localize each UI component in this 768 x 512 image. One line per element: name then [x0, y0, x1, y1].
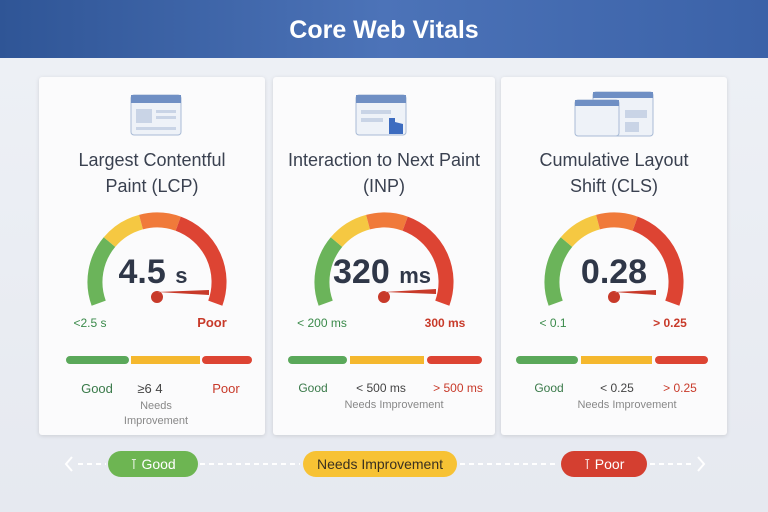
bar: CLS: [516, 356, 708, 364]
heading: (INP): [363, 176, 405, 196]
icon: shifted windows: [574, 92, 654, 136]
icon: browser: [130, 94, 182, 136]
heading: Largest Contentful: [78, 150, 226, 170]
heading: [78, 150, 226, 196]
gauge labels: <2.5 s: [73, 316, 107, 330]
gauge: CLS: [552, 220, 676, 303]
text: < 0.25: [600, 381, 634, 395]
heading: Paint (LCP): [105, 176, 199, 196]
panel: LCP: [39, 77, 265, 435]
heading: Shift (CLS): [570, 176, 658, 196]
text: Good: [298, 381, 328, 395]
text: Poor: [212, 381, 240, 396]
text: Good: [534, 381, 564, 395]
text: 0.28: [581, 253, 647, 291]
pill: needs improvement: Needs Improvement: [317, 456, 443, 472]
text: 320 ms: [333, 253, 431, 291]
text: ≥6 4: [137, 381, 163, 396]
bar labels: Good: [81, 381, 113, 396]
heading: Interaction to Next Paint: [288, 150, 480, 170]
text: Needs: [140, 400, 172, 412]
pill: good: [108, 451, 198, 477]
text: < 0.1: [539, 316, 567, 330]
text: Needs Improvement: [577, 399, 677, 411]
pill: good: ⊺ Good: [130, 456, 176, 472]
pill: poor: [561, 451, 647, 477]
legend line: [66, 457, 704, 471]
text: < 200 ms: [297, 316, 347, 330]
icon: browser click: [356, 94, 406, 136]
text: < 500 ms: [356, 381, 406, 395]
gauge: INP: [322, 220, 446, 303]
bar: INP: [288, 356, 482, 364]
pill: poor: ⊺ Poor: [584, 456, 624, 472]
text: > 0.25: [653, 316, 687, 330]
header: [0, 0, 768, 58]
heading: [288, 150, 480, 196]
text: Poor: [197, 315, 227, 330]
heading: [539, 150, 689, 196]
bar: LCP: [66, 356, 252, 364]
text: 300 ms: [425, 316, 465, 330]
panel: CLS: [501, 77, 727, 435]
title: Core Web Vitals: [289, 16, 479, 44]
text: Improvement: [124, 415, 188, 427]
text: > 500 ms: [433, 381, 483, 395]
text: Needs Improvement: [344, 399, 444, 411]
values: 4.5 s: [119, 253, 187, 291]
heading: Cumulative Layout: [539, 150, 689, 170]
panel: INP: [273, 77, 495, 435]
gauge: LCP: [95, 220, 219, 303]
pill: needs improvement: [303, 451, 457, 477]
text: > 0.25: [663, 381, 697, 395]
